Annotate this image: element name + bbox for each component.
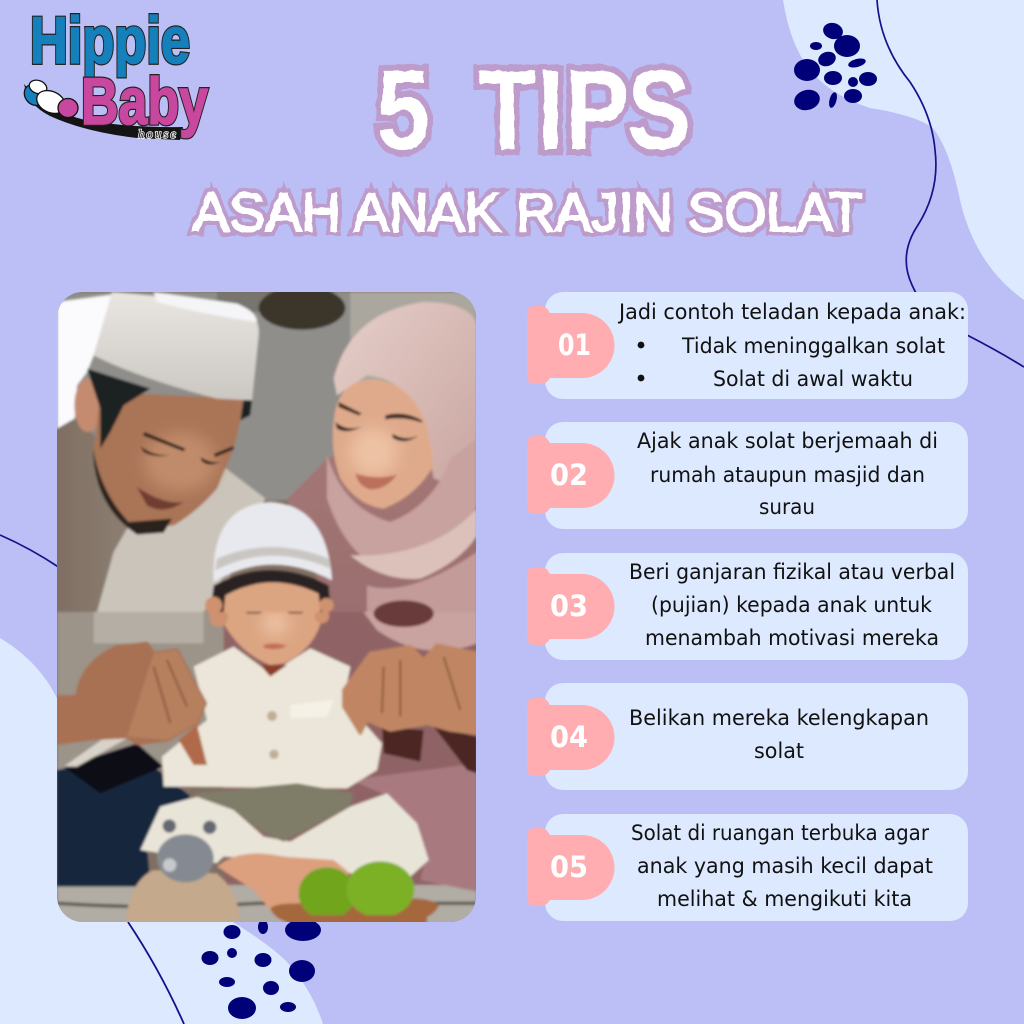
logo baby icon xyxy=(20,78,78,118)
logo: Hippie Baby house xyxy=(20,3,208,141)
subtitle: ASAH ANAK RAJIN SOLAT: ASAH ANAK RAJIN SOLAT xyxy=(193,181,862,243)
card 03 xyxy=(545,553,968,660)
logo word Hippie: Hippie xyxy=(30,3,190,77)
tip 02 text xyxy=(637,429,938,519)
number 03: 03 xyxy=(550,589,588,623)
tip 05 text xyxy=(631,821,933,911)
tip 02 text: surau xyxy=(759,495,815,519)
number tab 05 xyxy=(527,828,614,906)
card 02 xyxy=(545,422,968,529)
dots: top right xyxy=(792,21,877,113)
number 04: 04 xyxy=(550,720,588,754)
tip 05 text: anak yang masih kecil dapat xyxy=(637,854,933,878)
tip 01 text: Tidak meninggalkan solat xyxy=(681,334,945,358)
tip 03 text xyxy=(629,560,955,650)
tip 03 text: Beri ganjaran fizikal atau verbal xyxy=(629,560,955,584)
subtitle: ASAH ANAK RAJIN SOLAT: ASAH ANAK RAJIN SOLAT xyxy=(193,181,862,243)
tip 02 text: rumah ataupun masjid dan xyxy=(650,463,925,487)
dots: bottom xyxy=(202,919,321,1019)
photo lower: child and hands xyxy=(57,597,477,930)
curved line: left xyxy=(0,535,60,568)
panel: tip 04 xyxy=(527,683,968,790)
panel: tip 03 xyxy=(527,553,968,660)
photo upper: parents xyxy=(57,286,477,627)
tip 04 text: Belikan mereka kelengkapan xyxy=(629,706,929,730)
number 02: 02 xyxy=(550,458,588,492)
panel: tip 05 xyxy=(527,814,968,921)
tip 05 text: melihat & mengikuti kita xyxy=(657,887,912,911)
tip 01 text xyxy=(617,300,966,391)
card 01 xyxy=(545,292,968,399)
blob: bottom left xyxy=(0,638,323,1024)
number tab 01 xyxy=(527,306,614,384)
title: 5 TIPS: 5 TIPS xyxy=(377,48,691,174)
tip 02 text: Ajak anak solat berjemaah di xyxy=(637,429,938,453)
number 05: 05 xyxy=(550,850,588,884)
photo: family praying xyxy=(57,286,477,930)
card 05 xyxy=(545,814,968,921)
curved line: top right xyxy=(877,0,1024,367)
logo swoosh xyxy=(24,84,183,140)
blob: top right xyxy=(783,0,1024,300)
tip 03 text: (pujian) kepada anak untuk xyxy=(651,593,933,617)
panel: tip 02 xyxy=(527,422,968,529)
number tab 04 xyxy=(527,698,614,776)
number 01: 01 xyxy=(558,328,591,362)
tip 01 text: Jadi contoh teladan kepada anak: xyxy=(617,300,966,324)
logo word house: house xyxy=(138,126,176,141)
tip 04 text xyxy=(629,706,929,763)
card 04 xyxy=(545,683,968,790)
curved line: bottom xyxy=(128,922,184,1024)
tip 05 text: Solat di ruangan terbuka agar xyxy=(631,821,929,845)
number tab 03 xyxy=(527,567,614,645)
logo word Baby: Baby xyxy=(81,64,208,138)
tip 04 text: solat xyxy=(754,739,804,763)
tip 03 text: menambah motivasi mereka xyxy=(645,626,939,650)
tip 01 text: Solat di awal waktu xyxy=(713,367,913,391)
panel: tip 01 xyxy=(527,292,968,399)
number tab 02 xyxy=(527,436,614,514)
logo word Hippie: Hippie xyxy=(30,3,190,77)
logo word Baby: Baby xyxy=(81,64,208,138)
